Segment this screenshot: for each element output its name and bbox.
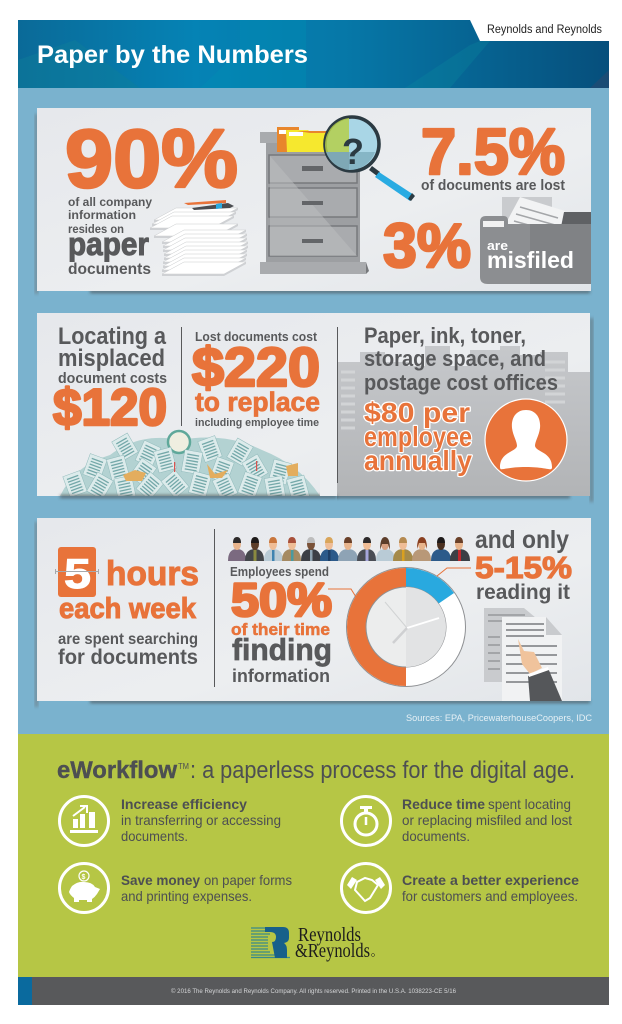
panel: eWorkflow [18, 734, 609, 977]
text: of their time: of their time [231, 621, 330, 639]
text: of all company information: resides on [68, 222, 124, 236]
benefit: increase efficiency [60, 796, 281, 846]
text: hours each week: each week [59, 593, 197, 625]
text: are spent searching [58, 631, 198, 669]
text: of all company information: paper [68, 226, 149, 262]
stat: $80 per employee annually: $80 per [364, 397, 470, 428]
icon: misfiled folder [480, 197, 591, 284]
icon: bar chart arrow [60, 796, 108, 846]
city skyline background [337, 346, 590, 496]
icon: row of employees [228, 537, 470, 561]
footer bar [18, 977, 609, 1005]
text: locating a misplaced document: Locating a [58, 323, 167, 350]
text: and only 5-15% reading it [475, 526, 572, 604]
icon: piggy bank: $ [82, 874, 86, 881]
stat: $80 per employee annually [364, 397, 472, 476]
text: lost documents cost: Lost documents cost [195, 329, 318, 344]
text: sources: Sources: EPA, PricewaterhouseCoopers, IDC [406, 713, 592, 724]
divider [214, 529, 215, 687]
brand tab [470, 20, 622, 41]
text: are spent searching: for documents [58, 646, 198, 669]
heading: eWorkflow: eWorkflow [57, 757, 177, 784]
logo: Reynolds and Reynolds: &Reynolds [295, 940, 370, 962]
text: are spent searching: are spent searching [58, 631, 198, 648]
text: hours each week: hours [106, 555, 199, 593]
panel: paper statistics [35, 108, 591, 294]
benefit: save money: and printing expenses. [121, 888, 252, 904]
text: and only 5-15% reading it: reading it [476, 581, 570, 604]
stat: $120: $120 [53, 379, 167, 437]
text: of all company information: documents [68, 261, 151, 278]
heading: eWorkflow: : a paperless process for the digital age. [190, 757, 575, 784]
icon: handshake [342, 864, 390, 912]
leader lines [328, 568, 471, 597]
benefit: reduce time: or replacing misfiled and lost [402, 812, 572, 828]
text: hours each week [59, 555, 199, 625]
benefit: increase efficiency: in transferring or accessing [121, 812, 281, 828]
text: locating a misplaced document [58, 323, 167, 387]
text: paper, ink, toner costs: postage cost offices [364, 370, 558, 395]
panel: cost of paper [37, 313, 593, 510]
blue page background [18, 20, 609, 735]
text: of all company information: information [68, 208, 136, 222]
illustration: pile of paper [37, 431, 337, 510]
text: of documents are lost: of documents are lost [421, 177, 565, 194]
icon: flip number 5: 5 [64, 550, 91, 597]
stat: 50%: 50% [231, 573, 332, 626]
text: locating a misplaced document: document costs [58, 371, 167, 387]
text: locating a misplaced document: misplaced [58, 345, 165, 372]
heading: eWorkflow [57, 757, 575, 784]
benefit: save money: Save money [121, 872, 200, 888]
icon: filing cabinet [260, 132, 369, 274]
text: paper, ink, toner costs [364, 323, 558, 395]
text: paper, ink, toner costs: Paper, ink, toner, [364, 323, 526, 348]
text: employees spend: Employees spend [230, 564, 329, 579]
divider [181, 327, 182, 426]
benefit: reduce time [342, 796, 572, 846]
text: of all company information [68, 195, 152, 278]
text: finding information [232, 632, 332, 686]
title: Paper by the Numbers [37, 41, 308, 69]
icon: paper stacks and pens [150, 200, 248, 276]
text: finding information: information [232, 666, 330, 686]
panel: time spent [35, 518, 591, 707]
icon: misfiled folder: misfiled [487, 247, 574, 273]
benefit: reduce time: spent locating [488, 796, 571, 812]
icon: piggy bank [60, 864, 108, 912]
footer bar: © 2016 The Reynolds and Reynolds Company. All rights reserved. Printed in the U.S.A. 1038223-CE 5/16 [171, 988, 457, 995]
benefit: reduce time: documents. [402, 828, 470, 844]
benefit: better experience: Create a better experience [402, 872, 579, 888]
stat: 3%: 3% [383, 212, 471, 281]
text: finding information: finding [232, 632, 332, 667]
text: including employee time: including employee time [195, 417, 319, 429]
stat: $80 per employee annually: annually [364, 445, 472, 476]
icon: misfiled folder: are [487, 239, 508, 253]
logo: Reynolds and Reynolds: Reynolds [298, 924, 361, 946]
benefit: increase efficiency: Increase efficiency [121, 796, 247, 812]
benefit: save money [60, 864, 292, 912]
header banner [18, 20, 609, 88]
icon: magnifying glass: ? [342, 131, 364, 172]
text: and only 5-15% reading it: 5-15% [475, 550, 572, 585]
icon: documents with pointing hand [484, 608, 562, 701]
text: paper, ink, toner costs: storage space, and [364, 346, 546, 371]
chart: time donut clock [346, 568, 466, 686]
benefit: better experience [342, 864, 579, 912]
stat: 90%: 90% [65, 112, 238, 205]
text: and only 5-15% reading it: and only [475, 526, 569, 554]
benefit: reduce time: Reduce time [402, 796, 485, 812]
icon: flip number 5 [55, 547, 99, 597]
benefit: better experience: for customers and employees. [402, 888, 578, 904]
stat: 7.5%: 7.5% [421, 115, 565, 188]
divider [337, 327, 338, 483]
text: to replace: to replace [195, 387, 320, 417]
stat: $220: $220 [192, 336, 320, 398]
logo: Reynolds and Reynolds [251, 924, 374, 962]
benefit: increase efficiency: documents. [121, 828, 188, 844]
text: of all company information: of all company [68, 195, 152, 209]
icon: employee avatar [485, 399, 567, 481]
icon: stopwatch [342, 796, 390, 846]
stat: $80 per employee annually: employee [364, 421, 472, 452]
icon: folders in cabinet [277, 127, 349, 152]
heading: eWorkflow: TM [178, 762, 189, 771]
brand tab: Reynolds and Reynolds [487, 24, 602, 36]
icon: magnifying glass [325, 117, 415, 201]
benefit: save money: on paper forms [204, 872, 292, 888]
